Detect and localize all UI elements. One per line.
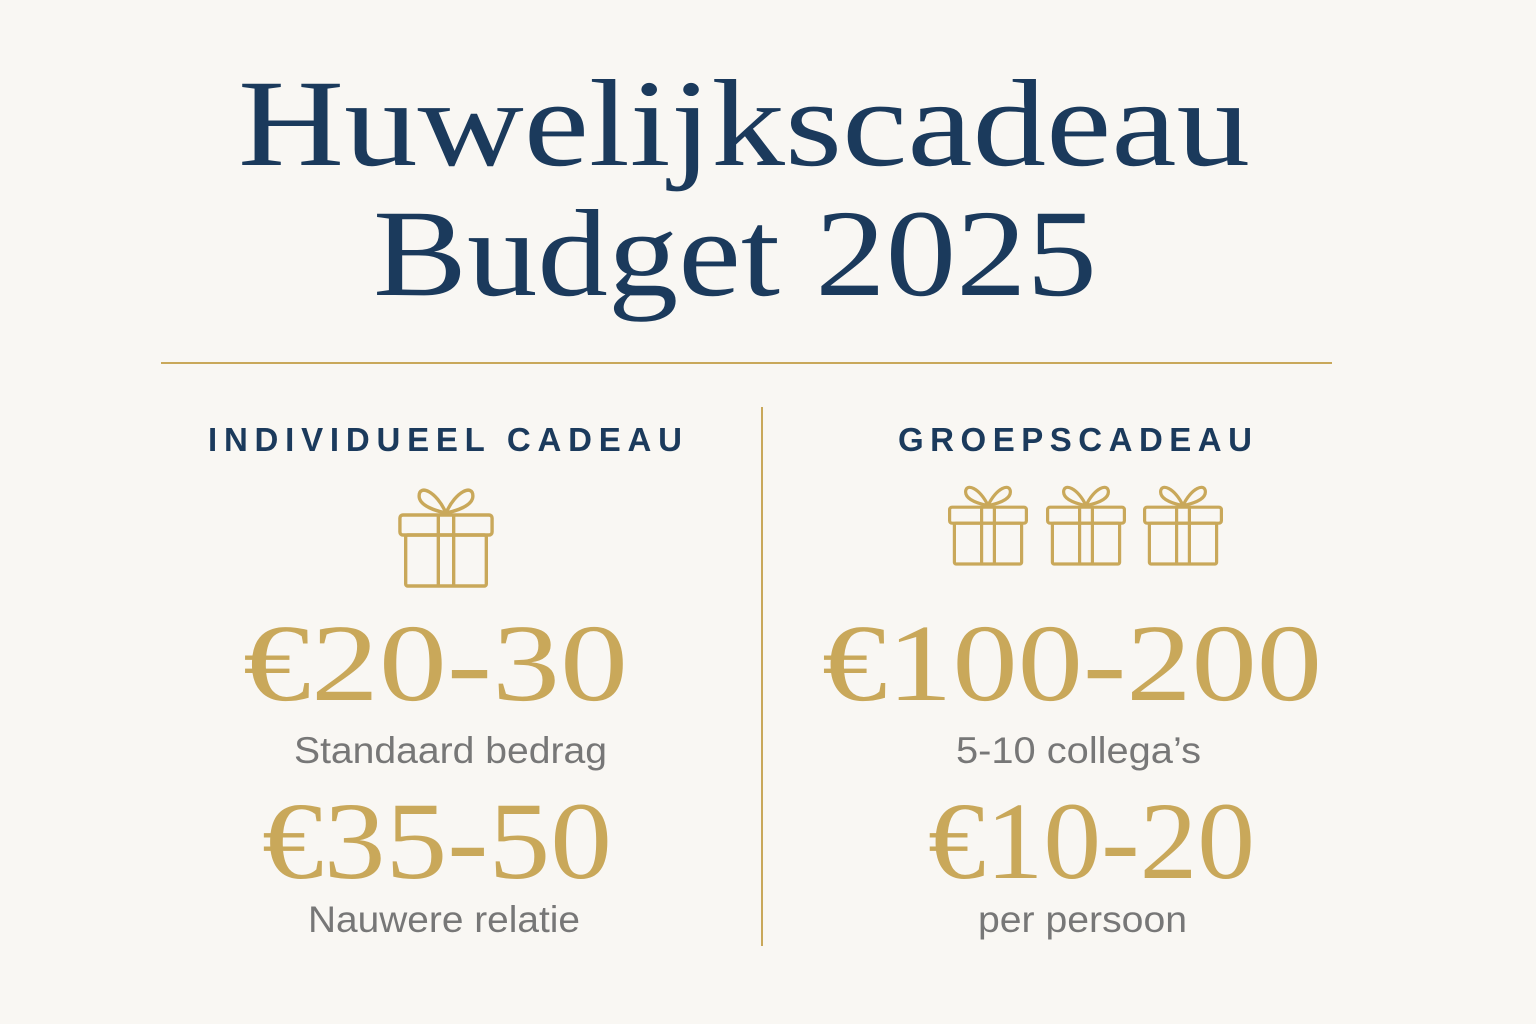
title bbox=[238, 55, 1250, 322]
label: collega's: 5-10 collega’s bbox=[956, 730, 1201, 771]
label: per persoon: per persoon bbox=[978, 899, 1187, 940]
price: 100-200: €100-200 bbox=[822, 602, 1322, 724]
heading: individueel cadeau: INDIVIDUEEL CADEAU bbox=[208, 421, 686, 458]
icon: three gifts bbox=[950, 487, 1221, 564]
price: 35-50: €35-50 bbox=[262, 780, 612, 902]
panel: groepscadeau bbox=[822, 421, 1322, 940]
heading: groepscadeau: GROEPSCADEAU bbox=[898, 421, 1256, 458]
title: Budget 2025 bbox=[373, 185, 1097, 322]
panel: individueel bbox=[208, 421, 686, 940]
price: 10-20: €10-20 bbox=[928, 780, 1255, 902]
title: Huwelijkscadeau bbox=[238, 55, 1250, 192]
label: standaard bedrag: Standaard bedrag bbox=[294, 730, 607, 771]
price: 20-30: €20-30 bbox=[243, 602, 628, 724]
label: nauwere relatie: Nauwere relatie bbox=[308, 899, 580, 940]
icon: gift bbox=[400, 490, 492, 586]
